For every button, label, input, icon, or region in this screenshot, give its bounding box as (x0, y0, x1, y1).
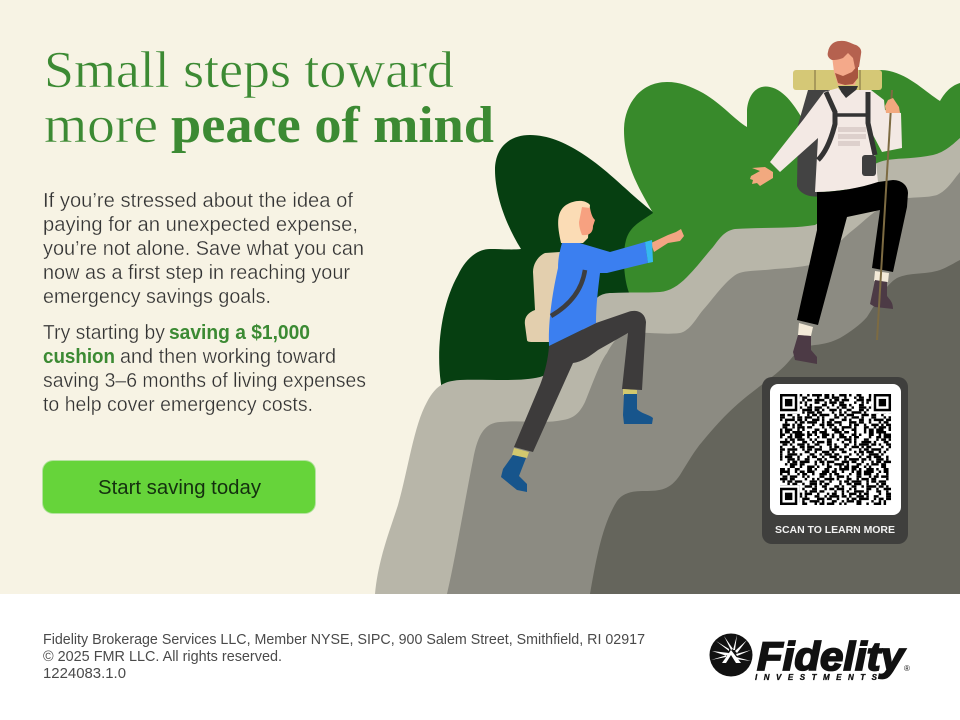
title (44, 42, 494, 154)
logo wordmark: Fidelity (757, 635, 906, 679)
illustration: foliage behind the mountains (439, 70, 960, 400)
footer legal text: Fidelity Brokerage Services LLC, Member NYSE, SIPC, 900 Salem Street, Smithfield, RI 02917 (43, 632, 645, 648)
face (579, 207, 595, 235)
neck (838, 86, 858, 99)
mountain: light ridge (375, 138, 960, 594)
hair (828, 41, 861, 68)
text block: intro paragraph: you’re not alone. Save what you can (43, 238, 364, 260)
text block: savings advice paragraph (43, 322, 366, 416)
legs (797, 180, 908, 325)
backpack (797, 90, 830, 197)
text block: intro paragraph (43, 190, 364, 308)
title: more (44, 97, 158, 154)
legs (514, 311, 646, 452)
registered mark: ® (904, 664, 910, 673)
text block: savings advice paragraph: saving 3–6 months of living expenses (43, 370, 366, 392)
text block: savings advice paragraph: saving a $1,000 (169, 322, 310, 344)
socks (512, 389, 637, 458)
boots (793, 280, 893, 364)
bush: mid green (624, 70, 960, 330)
qr caption: SCAN TO LEARN MORE (775, 524, 895, 536)
title: peace of mind (171, 97, 494, 154)
cuff (645, 240, 653, 263)
text block: intro paragraph: paying for an unexpected expense, (43, 214, 358, 236)
text block: savings advice paragraph: Try starting by (43, 322, 165, 344)
logo emblem (710, 634, 752, 676)
trekking pole (877, 90, 892, 340)
logo: Fidelity Investments (710, 634, 910, 682)
left hand (750, 167, 773, 186)
arm and hand (651, 229, 684, 252)
face (832, 50, 858, 85)
footer legal text (43, 632, 645, 682)
beard (835, 65, 858, 85)
qr code (780, 394, 891, 505)
bush: dark green (439, 135, 660, 400)
logo subline: INVESTMENTS (755, 673, 878, 682)
text block: intro paragraph: If you’re stressed about the idea of (43, 190, 353, 212)
shirt (770, 88, 902, 192)
socks (798, 271, 889, 336)
text block: intro paragraph: emergency savings goals. (43, 286, 271, 308)
title: Small steps toward (44, 42, 454, 99)
right hand (885, 98, 900, 113)
button: start saving today: Start saving today (98, 477, 261, 499)
pouch (862, 155, 876, 176)
bedroll (793, 70, 882, 90)
illustration: mountains (375, 138, 960, 594)
hair (558, 201, 590, 243)
mountain: dark ridge (590, 260, 960, 594)
finder patterns (780, 394, 891, 505)
text block: savings advice paragraph: to help cover emergency costs. (43, 394, 313, 416)
text block: intro paragraph: now as a first step in reaching your (43, 262, 350, 284)
chest straps (838, 127, 866, 146)
figure: climbing woman (501, 201, 684, 492)
qr card (762, 377, 908, 544)
backpack (525, 252, 562, 342)
footer legal text: © 2025 FMR LLC. All rights reserved. (43, 649, 282, 665)
bag strap (551, 270, 585, 316)
harness (818, 92, 875, 160)
footer legal text: 1224083.1.0 (43, 666, 126, 682)
mountain: mid ridge (447, 172, 960, 594)
button: start saving today (42, 460, 316, 514)
shirt (549, 242, 648, 346)
text block: savings advice paragraph: cushion (43, 346, 115, 368)
boots (501, 394, 653, 492)
text block: savings advice paragraph: and then working toward (120, 346, 336, 368)
figure: hiker man (750, 41, 908, 364)
